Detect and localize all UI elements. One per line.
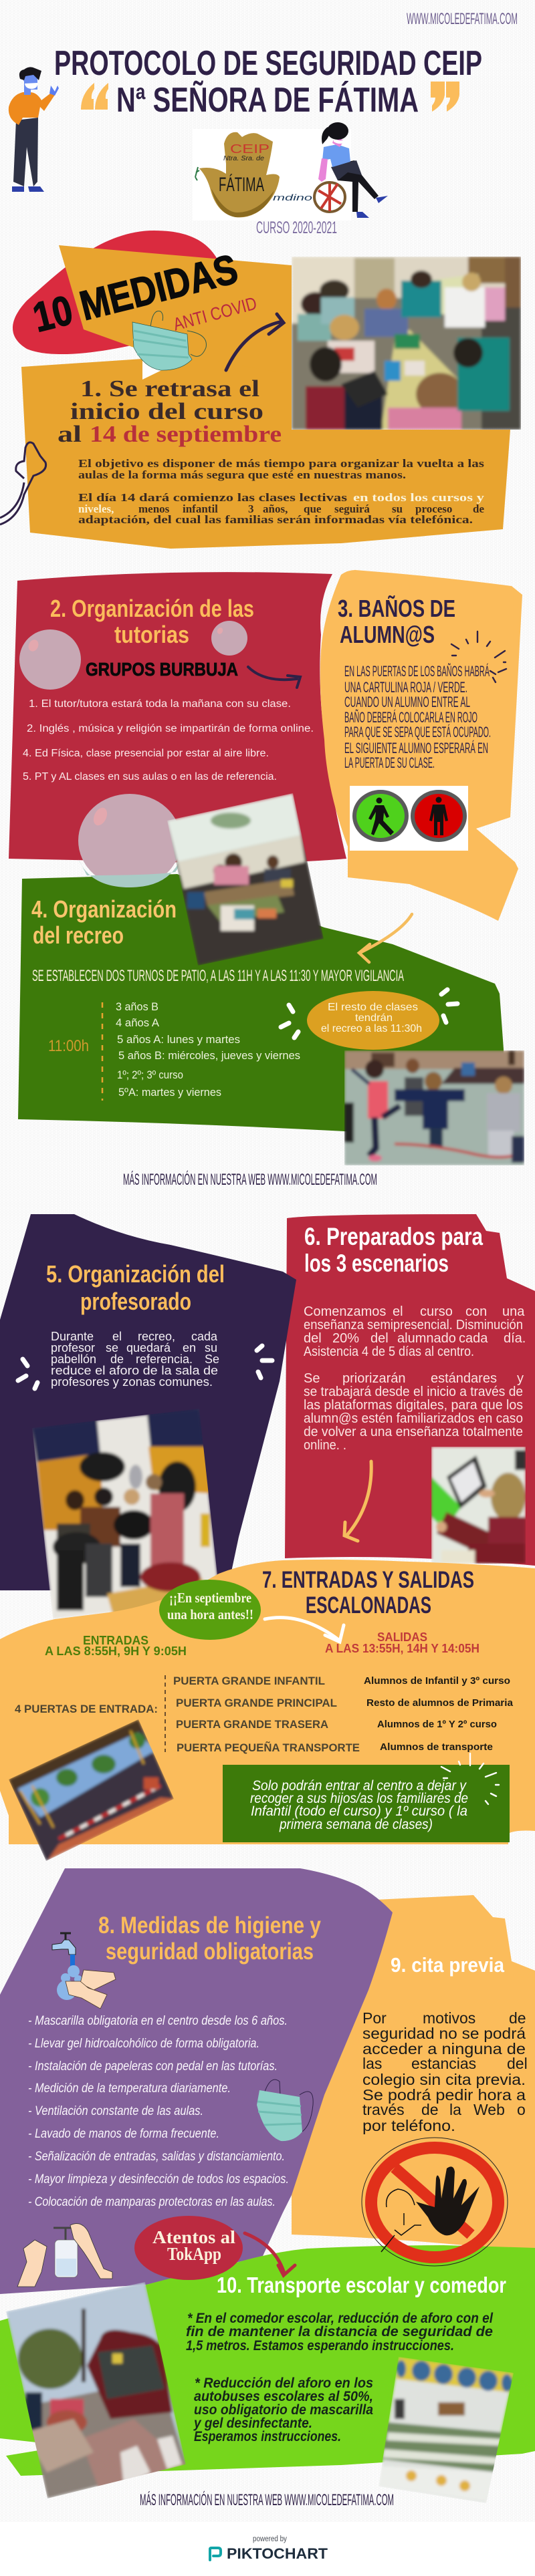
text: digital platforms: online. . [304,1438,346,1453]
list of groups [116,1000,300,1099]
photo: school bus [6,2282,186,2498]
text: prior appointment [362,2009,528,2134]
panel: measure 4 recreo [18,794,504,1136]
icon: white sparkle lines [441,1753,499,1804]
heading: tutorias [114,621,189,648]
text: semi-presential teaching: del [304,1331,322,1346]
list of groups: 5 años A: lunes y martes [117,1033,240,1046]
text: school canteen [186,2311,494,2353]
text: recess and staff room: profesores y zonas comunes. [51,1375,213,1389]
text: prior appointment: por teléfono. [362,2117,455,2134]
text: school buses: y gel desinfectante. [193,2416,312,2431]
heading: 4. Organización [31,895,177,923]
list of groups: 4 años A [116,1016,160,1029]
icon: hands with gel dispenser [17,2224,112,2287]
text: measure 1 detail: niveles, [78,503,114,515]
icon: pointing hand [0,442,46,525]
heading [50,595,254,648]
callout: rest of classes [307,991,439,1050]
list of groups: 3 años B [116,1000,158,1013]
text: semi-presential teaching: curso [420,1304,453,1319]
heading: del recreo [33,921,124,949]
text: digital platforms: y [517,1371,524,1386]
text: semi-presential teaching: alumnado [397,1331,456,1346]
text: semi-presential teaching: Comenzamos [304,1304,386,1319]
text: recess and staff room: de [110,1352,124,1366]
heading: 9. cita previa [391,1953,505,1977]
text: bathroom rule [344,663,491,771]
panel: measure 10 transporte y comedor [0,2138,535,2476]
logo: CEIP Ntra Sra de Fátima hand and wheel: CEIP [230,142,270,156]
icon: green and red pedestrian signals [350,786,468,851]
callout: families allowed: primera semana de clases) [279,1817,433,1832]
text: semi-presential teaching: una [502,1304,525,1319]
icon: tap and washing hands [52,1933,116,2009]
heading: measure 1: inicio del curso [70,398,263,424]
photo: teachers holding chalkboard signs [32,1409,220,1619]
text: measure 1 detail: adaptación, del cual las familias serán informadas vía telefónica. [78,513,473,526]
title [54,44,482,120]
list of groups: 5 años B: miércoles, jueves y viernes [118,1049,300,1062]
text: measure 1 detail: 3 [248,503,254,515]
icon: white sparks [18,1346,272,1389]
list of rules: 1. El tutor/tutora estará toda la mañana con su clase. [29,698,291,710]
photo: teacher and children at table [167,793,324,966]
callout: families allowed: recoger a sus hijos/as los familiares de [250,1791,468,1806]
text: recess and staff room [51,1330,219,1389]
text: semi-presential teaching: el [393,1304,403,1319]
text: measure 1 detail: en todos los cursos y [353,491,485,504]
text: measure 1 detail: años, [263,503,288,515]
heading [31,895,177,949]
text: measure 1 detail: su [392,503,403,515]
speech pointer [142,361,167,380]
text: recess and staff room: recreo, [138,1330,175,1343]
heading: ALUMN@S [340,621,435,648]
heading: 5. Organización del [46,1260,225,1288]
text: recess and staff room: Durante [51,1330,94,1343]
entrances times [45,1634,187,1658]
arrow [226,314,284,370]
text: semi-presential teaching: con [465,1304,487,1319]
logo: CEIP Ntra Sra de Fátima hand and wheel: FÁTIMA [219,174,264,196]
dashed timeline [102,1002,103,1101]
school year: CURSO 2020-2021 [256,219,337,237]
photo: school court [9,1719,174,1861]
purple background [0,1868,393,2294]
red background [285,1214,535,1566]
entrances times: ENTRADAS [83,1634,148,1647]
arrow [359,914,412,962]
list of hygiene measures: - Mascarilla obligatoria en el centro desde los 6 años. [28,2014,288,2028]
yellow background [292,1895,535,2253]
yellow background [320,570,522,921]
illustration: woman with mask sitting [318,122,388,218]
callout: atentos al TokApp: TokApp [167,2244,221,2264]
doors table: Alumnos de 1º Y 2º curso [377,1719,497,1730]
text: prior appointment: motivos [423,2009,475,2027]
text: recess and staff room: cada [191,1330,218,1343]
heading: 6. Preparados para [304,1223,483,1250]
text: recess and staff room: en [183,1341,196,1354]
text: semi-presential teaching: del [370,1331,389,1346]
text: prior appointment: acceder a ninguna de [362,2040,526,2057]
text: measure 1 detail: de [473,503,484,515]
panel: measure 7 entradas y salidas [0,1560,535,1844]
entrances times: A LAS 8:55H, 9H Y 9:05H [45,1644,187,1658]
text: recess and staff room: su [205,1341,217,1354]
arrow [344,1461,371,1541]
callout: families allowed: Infantil (todo el curso) y 1º curso ( la [251,1804,467,1819]
text: prior appointment: del [507,2055,528,2072]
bubble over red and green [78,794,181,887]
text: prior appointment: de [509,2009,526,2027]
text: school buses: * Reducción del aforo en los [195,2376,373,2391]
text: measure 1 detail [78,457,485,526]
list of hygiene measures [28,2014,289,2209]
list of hygiene measures: - Llevar gel hidroalcohólico de forma obligatoria. [28,2037,259,2051]
heading [98,1912,321,1965]
text: semi-presential teaching: día. [504,1331,526,1346]
icon: small bubble [211,621,247,656]
time label: 11:00h [48,1037,89,1055]
heading: measure 1: al [58,421,82,447]
panel: measure 5 profesorado [0,1214,296,1590]
panel: 10 medidas and measure 1 [0,231,510,549]
text: measure 1 detail: proceso [415,503,452,515]
text: recess and staff room: referencia. [136,1352,193,1366]
panel: measure 3 baños [320,570,522,921]
text: prior appointment: o [517,2101,526,2118]
text: recess and staff room: quedará [126,1341,171,1354]
piktochart wordmark: PIKTOCHART [227,2545,328,2562]
doors table: PUERTA GRANDE TRASERA [176,1718,328,1731]
icon: closing quotation marks [431,82,459,112]
icon: no entry sign [362,2138,508,2266]
exits times: A LAS 13:55H, 14H Y 14:05H [325,1642,479,1655]
heading [338,594,455,648]
powered by label: powered by [253,2535,287,2543]
heading: profesorado [80,1288,191,1315]
doors table: PUERTA GRANDE INFANTIL [173,1675,325,1687]
text: prior appointment: Por [362,2009,387,2027]
list of hygiene measures: - Señalización de entradas, salidas y distanciamiento. [28,2150,285,2164]
text: prior appointment: la [449,2101,461,2118]
text: digital platforms [304,1371,524,1453]
green background [18,874,504,1136]
text: recess and staff room: Se [205,1352,219,1366]
text: school buses: uso obligatorio de mascarilla [194,2402,373,2418]
text: school buses: Esperamos instrucciones. [194,2429,341,2444]
arrow [245,2233,295,2275]
heading [304,1223,483,1277]
purple background [0,1214,296,1590]
list of groups: 1º; 2º; 3º curso [117,1068,183,1081]
text: prior appointment: Web [473,2101,505,2118]
heading: los 3 escenarios [304,1250,449,1277]
text: measure 1 detail: aulas de la forma más segura que esté en nuestras manos. [78,468,406,481]
icon: face mask [257,2080,313,2141]
logo: CEIP Ntra Sra de Fátima hand and wheel: Ntra. Sra. de [223,155,264,162]
heading: measure 1: 14 de septiembre [90,421,282,447]
heading: seguridad obligatorias [106,1939,314,1965]
callout: one hour earlier in September [159,1580,261,1640]
heading: measure 1 [58,376,282,447]
callout: rest of classes: El resto de clases [328,1002,418,1013]
text: prior appointment: través [362,2101,405,2118]
list of groups: 5ºA: martes y viernes [118,1086,221,1099]
doors table: PUERTA GRANDE PRINCIPAL [176,1697,337,1709]
icon: piktochart logo [210,2548,221,2560]
list of hygiene measures: - Colocación de mamparas protectoras en las aulas. [28,2195,276,2209]
anti covid label: ANTI COVID [171,293,259,335]
doors table: Resto de alumnos de Primaria [366,1697,514,1709]
text: school canteen: 1,5 metros. Estamos esperando instrucciones. [186,2338,454,2353]
list of hygiene measures: - Instalación de papeleras con pedal en las tutorías. [28,2059,278,2073]
text: measure 1 detail: El día 14 dará comienzo las clases lectivas [78,491,347,504]
yellow background [0,1560,535,1844]
doors table [173,1675,514,1754]
text: digital platforms: de volver a una enseñanza totalmente [304,1425,523,1439]
text: semi-presential teaching [304,1304,526,1359]
text: digital platforms: priorizarán [342,1371,405,1386]
photo: school canteen [379,2357,514,2503]
text: semi-presential teaching: Asistencia 4 de 5 días al centro. [304,1344,474,1359]
list of hygiene measures: - Lavado de manos de forma frecuente. [28,2127,219,2141]
text: digital platforms: alumn@s estén familiarizados en caso [304,1411,523,1426]
text: recess and staff room: el [112,1330,122,1343]
text: digital platforms: se trabajará desde el inicio a través de [304,1385,523,1399]
text: measure 1 detail: menos [138,503,170,515]
heading [262,1567,474,1618]
arrow [265,1618,344,1642]
heading: measure 1: 1. Se retrasa el [80,376,259,402]
text: school canteen: fin de mantener la distancia de seguridad de [186,2324,493,2339]
text: digital platforms: estándares [431,1371,497,1386]
doors table: PUERTA PEQUEÑA TRANSPORTE [177,1741,360,1754]
text: digital platforms: las plataformas digitales, para que los [304,1398,523,1413]
text: school buses: autobuses escolares al 50%, [194,2389,373,2404]
text: prior appointment: estancias [411,2055,476,2072]
text: digital platforms: Se [304,1371,320,1386]
photo: child with tablet [431,1447,526,1564]
text: measure 1 detail: El objetivo es disponer de más tiempo para organizar la vuelta a las [78,457,484,470]
callout: families allowed: Solo podrán entrar al centro a dejar y [252,1778,467,1794]
callout: rest of classes: tendrán [355,1012,393,1024]
heading: 3. BAÑOS DE [338,594,455,622]
exits times [325,1630,479,1655]
arrow [248,667,300,688]
text: recess and staff room: reduce el aforo de la sala de [51,1364,218,1377]
orange body [21,265,510,549]
text: prior appointment: Se podrá pedir hora a [362,2086,526,2104]
heading: 10 medidas: 10 MEDIDAS [29,246,242,341]
panel: measure 8 higiene [0,1868,393,2294]
text: school canteen: * En el comedor escolar, reducción de aforo con el [187,2311,494,2326]
text: prior appointment: de [421,2101,439,2118]
list of rules: 5. PT y AL clases en sus aulas o en las de referencia. [23,771,277,782]
icon: opening quotation marks [81,83,108,110]
heading: ESCALONADAS [306,1592,431,1618]
text: measure 1 detail: infantil [183,503,218,515]
photo: children playing in playground [344,1050,524,1165]
orange banner [59,245,292,374]
text: semi-presential teaching: cada [459,1331,488,1346]
heading: 2. Organización de las [50,595,254,622]
list of rules: 4. Ed Física, clase presencial por estar al aire libre. [23,748,269,759]
callout: atentos al TokApp [134,2216,243,2280]
red background [9,572,346,863]
callout: families allowed [223,1765,510,1842]
list of hygiene measures: - Medición de la temperatura diariamente. [28,2082,231,2096]
title: Nª SEÑORA DE FÁTIMA [116,80,419,120]
text: recess and staff room: se [106,1341,118,1354]
list of hygiene measures: - Ventilación constante de las aulas. [28,2104,203,2118]
heading: 8. Medidas de higiene y [98,1912,321,1939]
panel: measure 9 cita previa [292,1895,535,2253]
text: bathroom rule: LA PUERTA DE SU CLASE. [344,754,435,771]
illustration: man with mask waving [9,67,59,192]
icon: face mask [132,311,206,370]
list of rules: 2. Inglés , música y religión se impartirán de forma online. [27,723,314,734]
photo: children in classroom [292,257,521,430]
red blob [13,231,217,354]
logo: CEIP Ntra Sra de Fátima hand and wheel: mdino [273,192,312,202]
text: measure 1 detail: que [304,503,322,515]
text: semi-presential teaching: 20% [332,1331,359,1346]
subheading: grupos burbuja: GRUPOS BURBUJA [86,659,238,680]
icon: white sparks [281,990,457,1038]
doors table: Alumnos de Infantil y 3º curso [364,1675,510,1687]
text: measure 1 detail: seguirá [334,503,370,515]
text: prior appointment: las [362,2055,382,2072]
exits times: SALIDAS [377,1630,427,1644]
icon: sparkle lines [451,631,506,682]
text: school buses [193,2376,373,2444]
text: prior appointment: seguridad no se podrá [362,2025,526,2042]
text: recess and staff room: profesor [51,1341,95,1354]
doors table: Alumnos de transporte [380,1741,493,1753]
callout: one hour earlier in September: ¡¡En septiembre [169,1590,251,1606]
list of rules [23,698,314,782]
heading [46,1260,225,1315]
list of hygiene measures: - Mayor limpieza y desinfección de todos los espacios. [28,2172,289,2186]
panel: measure 2 tutorias [9,572,346,863]
callout: rest of classes: el recreo a las 11:30h [321,1023,422,1034]
icon: big bubble [19,629,81,690]
text: prior appointment: colegio sin cita previa. [362,2071,526,2088]
callout: one hour earlier in September: una hora antes!! [167,1606,253,1622]
panel: measure 6 escenarios [285,1214,535,1566]
four doors label: 4 PUERTAS DE ENTRADA: [15,1703,158,1715]
dashed divider [165,1675,166,1752]
text: recess and staff room: pabellón [51,1352,96,1366]
logo: CEIP Ntra Sra de Fátima hand and wheel [193,129,351,221]
callout: atentos al TokApp: Atentos al [152,2227,236,2247]
green background [0,2245,535,2476]
